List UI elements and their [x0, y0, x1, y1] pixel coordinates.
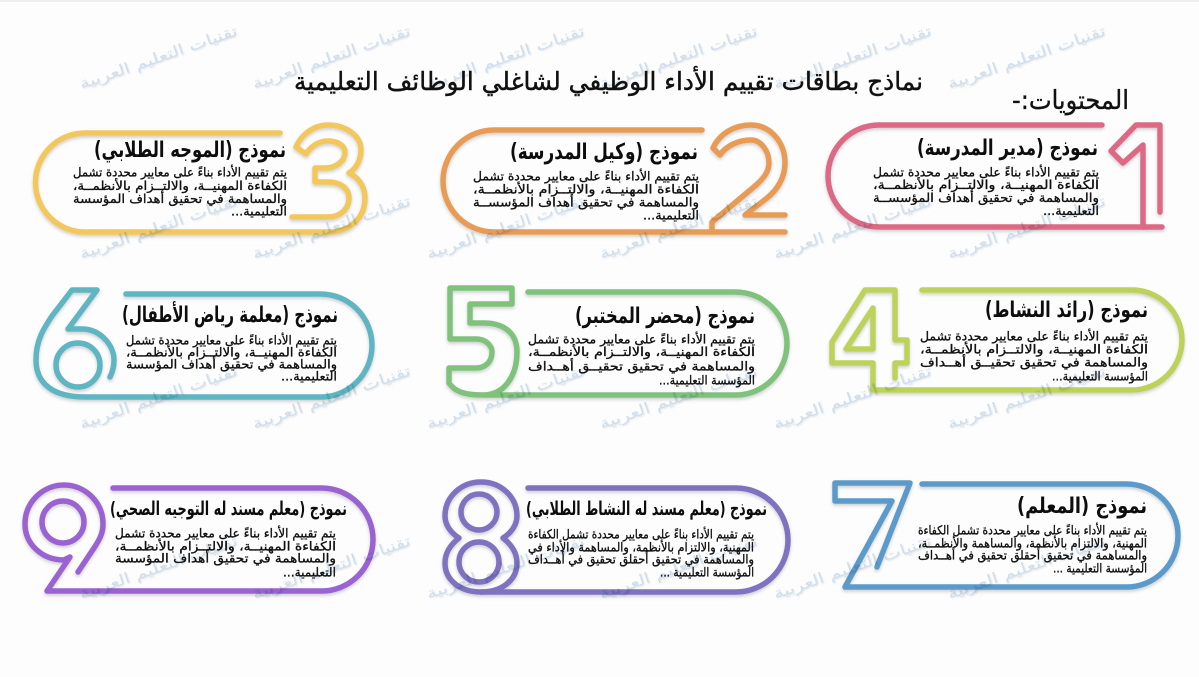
- body text: والمساهمة في تحقيق أحقلق تحقيق في أهــداف: [918, 546, 1147, 564]
- body text: والمساهمة في تحقيق تحقيــق أهــداف: [528, 358, 755, 374]
- heading: نموذج (معلمة رياض الأطفال): [122, 300, 338, 328]
- numeral 1 and card outline: [828, 125, 1162, 227]
- watermark pattern: تقنيات التعليم العربية: [945, 362, 1108, 433]
- body text: التعليمية...: [281, 368, 337, 384]
- numeral 2 and card outline: [443, 125, 785, 232]
- watermark pattern: تقنيات التعليم العربية: [77, 532, 240, 603]
- body text: [920, 328, 1149, 384]
- watermark pattern: تقنيات التعليم العربية: [597, 532, 760, 603]
- watermark pattern: تقنيات التعليم العربية: [77, 22, 240, 93]
- body text: يتم تقييم الأداء بناءً على معايير محددة تشمل: [528, 332, 756, 348]
- numeral 8 and card outline: [445, 482, 788, 592]
- title: نماذج بطاقات تقييم الأداء الوظيفي لشاغلي الوظائف التعليمية: [294, 65, 923, 97]
- body text: يتم تقييم الأداء بناءً على معايير محددة تشمل الكفاءة: [918, 522, 1147, 538]
- watermark pattern: تقنيات التعليم العربية: [771, 362, 934, 433]
- body text: التعليمية...: [643, 208, 699, 222]
- body text: التعليمية...: [231, 204, 287, 218]
- panel: card 7 teacher: [835, 483, 1178, 587]
- body text: المهنية، والالتزام بالأنظمة، والمساهمة والأداء في: [528, 540, 754, 556]
- body text: المؤسسة التعليمية ...: [1053, 560, 1147, 576]
- body text: يتم تقييم الأداء بناءً على معايير محددة تشمل: [126, 332, 337, 348]
- body text: الكفاءة المهنيــة، والالتــزام بالأنظمــة،: [115, 538, 336, 554]
- body text: التعليمية...: [283, 564, 336, 580]
- body text: يتم تقييم الأداء بناءً على معايير محددة تشمل: [873, 164, 1100, 180]
- watermark pattern: تقنيات التعليم العربية: [77, 362, 240, 433]
- watermark pattern: تقنيات التعليم العربية: [424, 22, 587, 93]
- heading: نموذج (محضر المختبر): [575, 304, 755, 329]
- body text: الكفاءة المهنيــة، والالتــزام بالأنظمــة،: [126, 344, 337, 360]
- watermark pattern: تقنيات التعليم العربية: [771, 532, 934, 603]
- body text: الكفاءة المهنيــة، والالتــزام بالأنظمــة،: [473, 182, 699, 198]
- watermark pattern: تقنيات التعليم العربية: [77, 192, 240, 263]
- panel: card 6 kindergarten teacher: [36, 290, 372, 397]
- panel: card 8 teacher assigned student activity: [445, 482, 788, 592]
- watermark pattern: تقنيات التعليم العربية: [250, 22, 413, 93]
- body text: والمساهمة في تحقيق أهداف المؤسســة: [473, 194, 699, 210]
- body text: المؤسسة التعليمية...: [1052, 368, 1148, 384]
- body text: والمساهمة في تحقيق أهداف المؤسسة: [73, 190, 287, 207]
- body text: المهنية، والالتزام بالأنظمة، والمساهمة والأنظمــة،: [918, 536, 1147, 552]
- panel: card 4 activity leader: [832, 290, 1182, 390]
- panel: card 9 teacher assigned health guidance: [25, 485, 373, 591]
- watermark pattern: تقنيات التعليم العربية: [597, 22, 760, 93]
- body text: والمساهمة في تحقيق أهداف المؤسسة: [126, 356, 337, 372]
- body text: يتم تقييم الأداء بناءً على معايير محددة تشمل: [473, 168, 700, 184]
- body text: [873, 164, 1100, 218]
- watermark pattern: تقنيات التعليم العربية: [250, 192, 413, 263]
- body text: والمساهمة في تحقيق أهداف المؤسســة: [873, 189, 1099, 206]
- watermark pattern: تقنيات التعليم العربية: [945, 192, 1108, 263]
- subtitle: contents: المحتويات:-: [1012, 86, 1129, 116]
- body text: يتم تقييم الأداء بناءً على معايير محددة تشمل الكفاءة: [528, 526, 754, 542]
- body text: [918, 522, 1147, 576]
- heading: نموذج (معلم مسند له التوجيه الصحي): [110, 498, 347, 520]
- heading: نموذج (معلم مسند له النشاط الطلابي): [526, 498, 767, 520]
- panel: card 5 lab preparer: [449, 288, 787, 395]
- watermark pattern: تقنيات التعليم العربية: [424, 362, 587, 433]
- numeral 7 and card outline: [835, 483, 1178, 587]
- body text: [115, 526, 337, 580]
- body text: المؤسسة التعليمية...: [659, 372, 755, 388]
- watermark pattern: تقنيات التعليم العربية: [424, 532, 587, 603]
- body text: [473, 168, 700, 222]
- body text: والمساهمة في تحقيق تحقيــق أهــداف: [920, 354, 1148, 370]
- watermark pattern: [77, 22, 1108, 603]
- panel: card 1 school principal: [828, 125, 1162, 227]
- watermark pattern: تقنيات التعليم العربية: [771, 192, 934, 263]
- watermark pattern: تقنيات التعليم العربية: [945, 532, 1108, 603]
- heading: نموذج (وكيل المدرسة): [510, 140, 698, 165]
- body text: المؤسسة التعليمية ...: [660, 564, 754, 580]
- watermark pattern: تقنيات التعليم العربية: [945, 22, 1108, 93]
- body text: الكفاءة المهنيــة، والالتــزام بالأنظمــة،: [873, 177, 1099, 193]
- body text: يتم تقييم الأداء بناءً على معايير محددة تشمل: [73, 164, 287, 180]
- numeral 6 and card outline: [36, 290, 372, 397]
- heading: نموذج (المعلم): [1017, 494, 1147, 519]
- watermark pattern: تقنيات التعليم العربية: [771, 22, 934, 93]
- body text: [528, 332, 756, 388]
- body text: [126, 332, 337, 384]
- body text: [528, 526, 754, 580]
- body text: والمساهمة في تحقيق أحقلق تحقيق في أهــداف: [528, 550, 754, 568]
- watermark pattern: تقنيات التعليم العربية: [597, 362, 760, 433]
- body text: الكفاءة المهنيــة، والالتــزام بالأنظمــة،: [73, 178, 287, 194]
- body text: والمساهمة في تحقيق أهداف المؤسسة: [115, 550, 336, 566]
- numeral 5 and card outline: [449, 288, 787, 395]
- numeral 4 and card outline: [832, 290, 1182, 390]
- watermark pattern: تقنيات التعليم العربية: [424, 192, 587, 263]
- heading: نموذج (رائد النشاط): [985, 298, 1148, 323]
- numeral 3 and card outline: [35, 125, 365, 232]
- heading: نموذج (مدير المدرسة): [917, 136, 1098, 161]
- watermark pattern: تقنيات التعليم العربية: [250, 362, 413, 433]
- body text: التعليمية...: [1043, 203, 1099, 218]
- watermark pattern: تقنيات التعليم العربية: [597, 192, 760, 263]
- body text: الكفاءة المهنيــة، والالتــزام بالأنظمــة،: [528, 344, 755, 360]
- body text: يتم تقييم الأداء بناءً على معايير محددة تشمل: [115, 526, 337, 542]
- watermark pattern: تقنيات التعليم العربية: [250, 532, 413, 603]
- numeral 9 and card outline: [25, 485, 373, 591]
- body text: يتم تقييم الأداء بناءً على معايير محددة تشمل: [920, 328, 1149, 344]
- body text: [73, 164, 287, 218]
- panel: card 2 deputy principal: [443, 125, 785, 232]
- panel: card 3 student counselor: [35, 125, 365, 232]
- body text: الكفاءة المهنيــة، والالتــزام بالأنظمــة،: [920, 342, 1148, 358]
- heading: نموذج (الموجه الطلابي): [94, 138, 286, 163]
